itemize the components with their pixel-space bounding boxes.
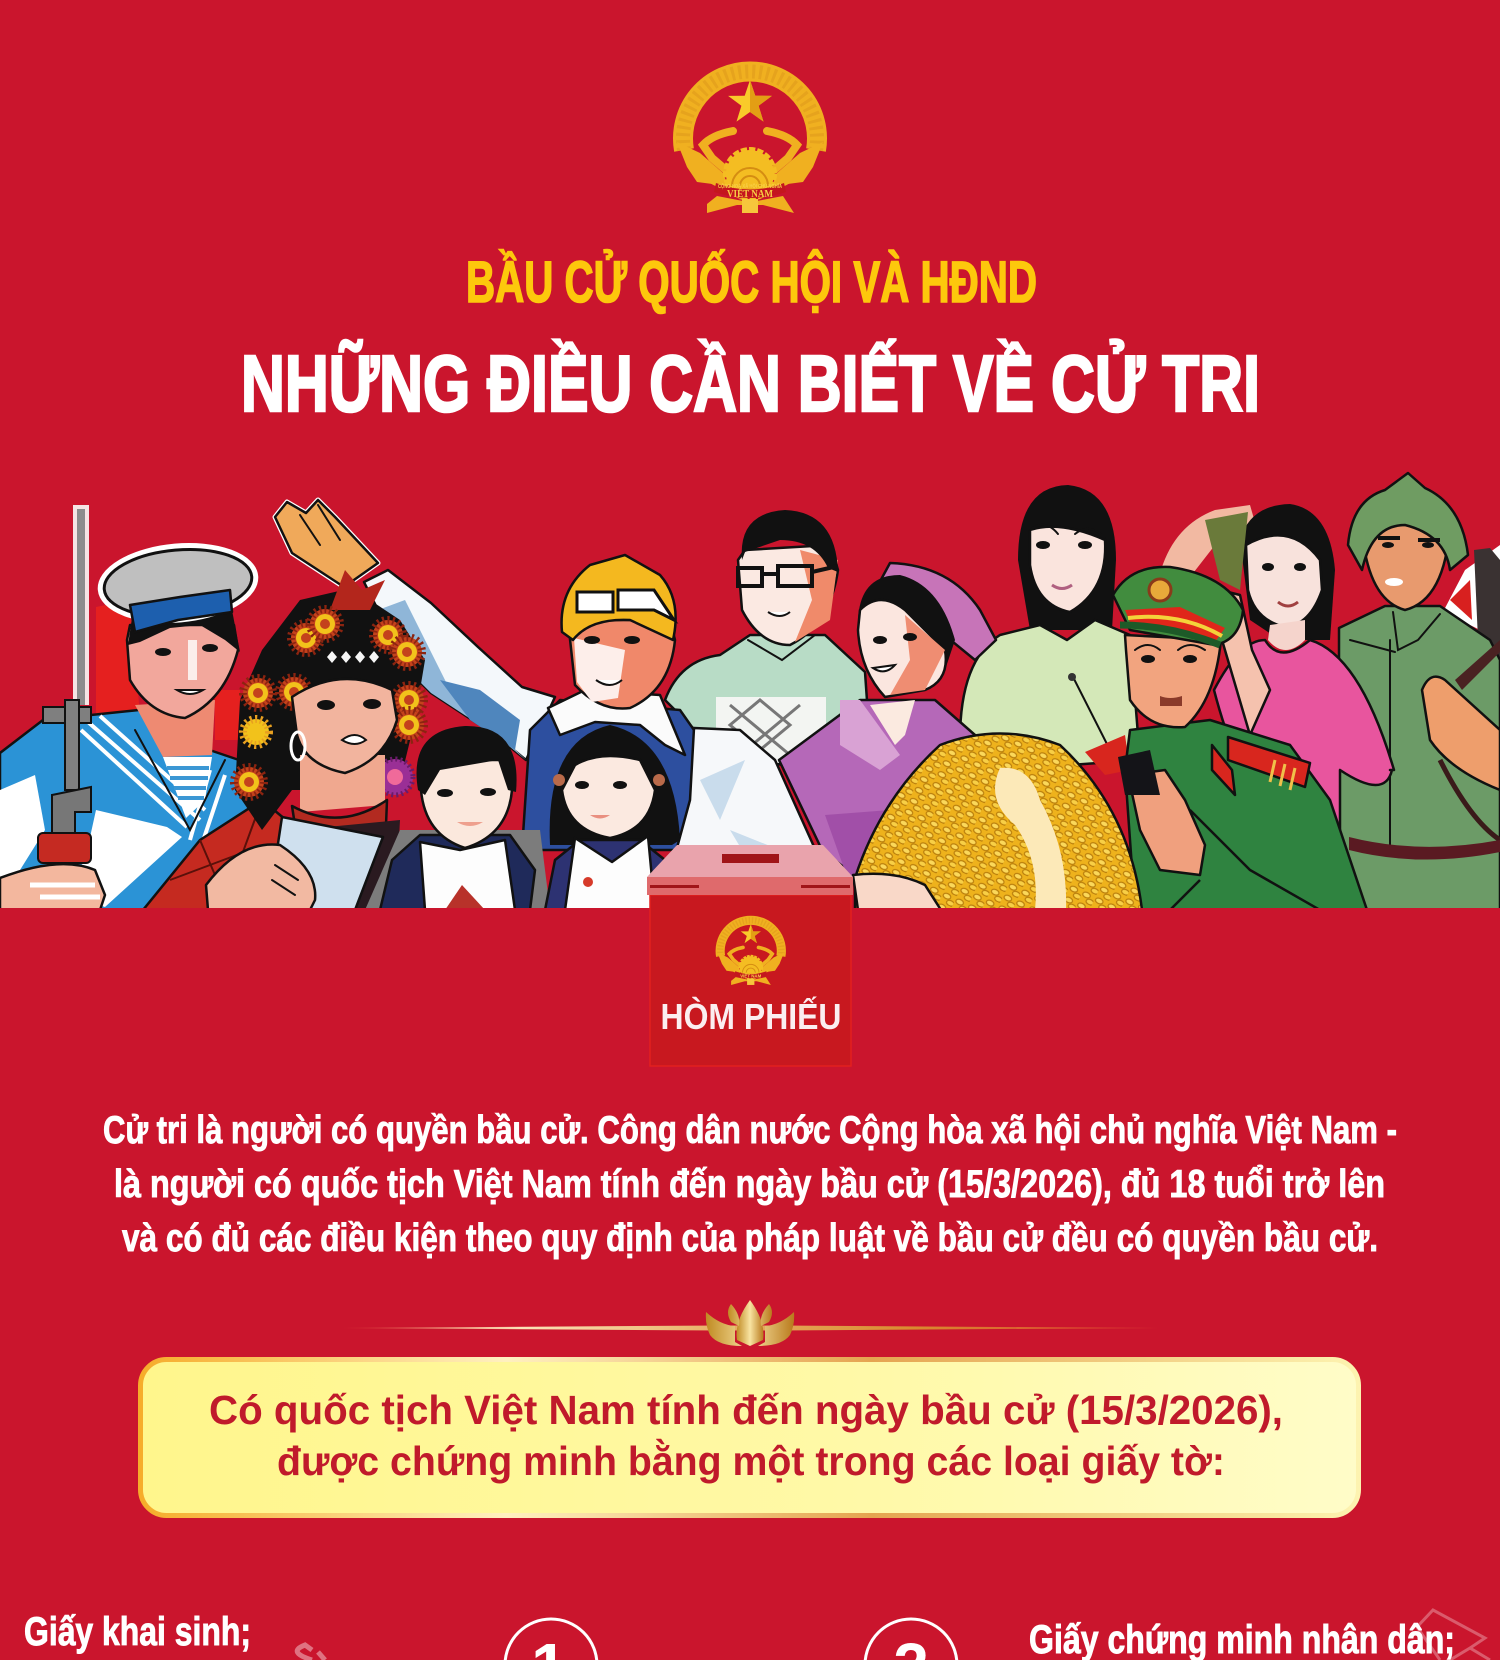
icon: small emblem: VIỆT NAM <box>740 972 761 979</box>
figure: woman with purple scarf <box>779 563 996 885</box>
callout: yellow requirement box: Có quốc tịch Việt Nam tính đến ngày bầu cử (15/3/2026), <box>209 1387 1283 1433</box>
figure: man with glasses <box>665 510 868 770</box>
figure: sailor <box>0 505 265 910</box>
figure: officer <box>1085 567 1367 910</box>
box body <box>650 895 851 1066</box>
ballot box <box>647 845 853 1066</box>
emblem: national emblem <box>677 71 823 213</box>
intro paragraph <box>103 1109 1397 1260</box>
figure: soldier <box>1339 473 1500 910</box>
figure: girl <box>545 725 680 910</box>
rifle <box>38 700 91 863</box>
box lid <box>647 845 853 877</box>
badge: number 2 <box>865 1619 957 1660</box>
decoration: faint curl <box>297 1645 325 1660</box>
icon: small emblem <box>717 920 784 985</box>
figure: boy <box>365 726 550 910</box>
emblem: national emblem: CỘNG HOÀ XÃ HỘI CHỦ NGHĨA <box>718 182 782 190</box>
figure: worker <box>272 498 815 852</box>
illustration: group of voters <box>0 473 1500 910</box>
emblem: national emblem: VIỆT NAM <box>727 187 774 200</box>
decoration: faint arrow outline <box>1417 1610 1490 1660</box>
figure: woman with flower headdress <box>143 570 425 910</box>
title: election subtitle: BẦU CỬ QUỐC HỘI VÀ HĐND <box>466 250 1037 315</box>
list item: birth certificate: Giấy khai sinh; <box>24 1610 251 1654</box>
rice basket <box>853 734 1142 910</box>
badge: number 1 <box>505 1619 597 1660</box>
callout: yellow requirement box <box>140 1360 1358 1516</box>
callout: yellow requirement box: được chứng minh bằng một trong các loại giấy tờ: <box>277 1438 1225 1484</box>
figure: woman in pink <box>1161 504 1394 850</box>
arm: raised sleeve <box>275 500 555 760</box>
figure: woman in ao dai <box>960 485 1140 770</box>
box label: HÒM PHIẾU <box>660 995 842 1037</box>
divider with lotus <box>342 1300 1159 1346</box>
flag behind sailor <box>96 600 240 740</box>
